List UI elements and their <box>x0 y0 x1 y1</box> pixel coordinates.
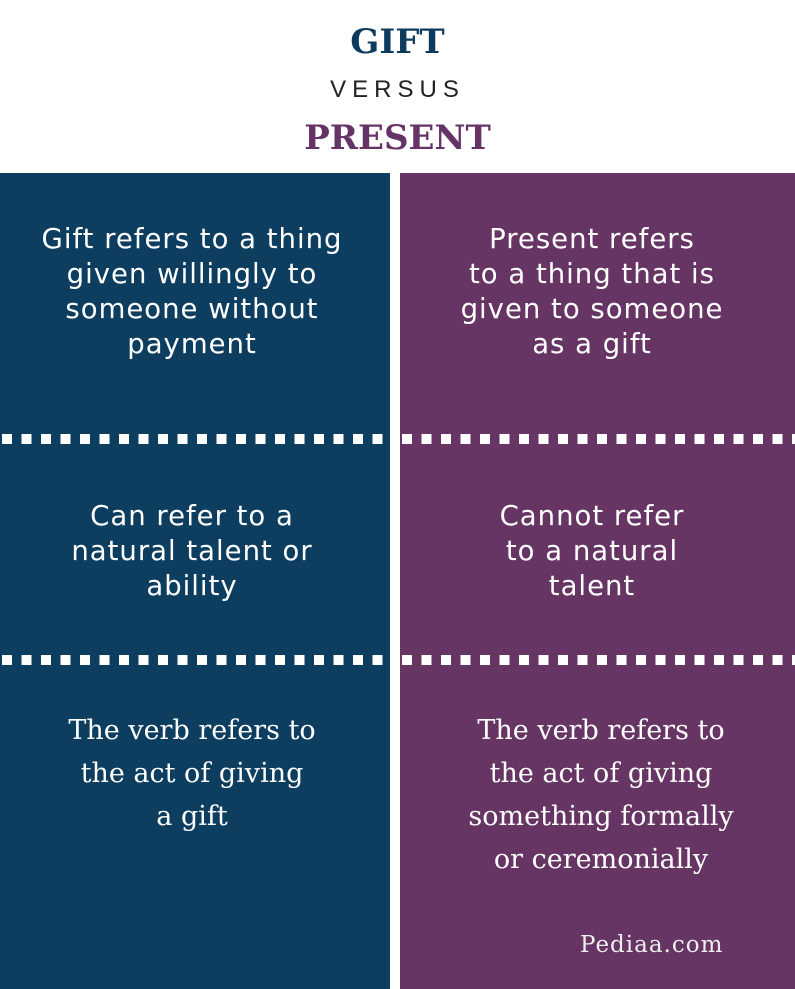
text: present verb: the act of giving <box>490 758 712 789</box>
text: gift verb: a gift <box>156 801 228 832</box>
text: present definition: as a gift <box>532 328 652 360</box>
panel: present column <box>400 173 795 989</box>
title: GIFT: GIFT <box>350 22 445 62</box>
text: present talent <box>500 500 684 602</box>
text: gift talent: natural talent or <box>71 535 313 567</box>
text: present verb: or ceremonially <box>494 844 708 875</box>
text: present talent: Cannot refer <box>500 500 684 532</box>
text: present definition: given to someone <box>461 293 723 325</box>
text: present definition: to a thing that is <box>469 258 715 290</box>
title: PRESENT: PRESENT <box>304 118 491 158</box>
panel: gift column <box>0 173 390 989</box>
text: gift definition: someone without <box>65 293 319 325</box>
text: present verb <box>468 715 734 875</box>
text: present verb: something formally <box>468 801 734 832</box>
text: gift definition: payment <box>127 328 257 360</box>
text: gift definition: given willingly to <box>67 258 317 290</box>
text: gift verb <box>68 715 316 832</box>
text: present definition: Present refers <box>489 223 695 255</box>
text: gift verb: The verb refers to <box>68 715 316 746</box>
text: gift definition: Gift refers to a thing <box>42 223 342 255</box>
subtitle: VERSUS: VERSUS <box>330 76 465 103</box>
text: gift definition <box>42 223 342 360</box>
text: present verb: The verb refers to <box>477 715 725 746</box>
text: gift talent: ability <box>146 570 238 602</box>
text: gift verb: the act of giving <box>81 758 303 789</box>
logo: Pediaa.com: Pediaa.com <box>580 932 723 958</box>
text: gift talent: Can refer to a <box>90 500 294 532</box>
text: present talent: talent <box>549 570 635 602</box>
text: present definition <box>461 223 723 360</box>
text: present talent: to a natural <box>506 535 678 567</box>
text: gift talent <box>71 500 313 602</box>
